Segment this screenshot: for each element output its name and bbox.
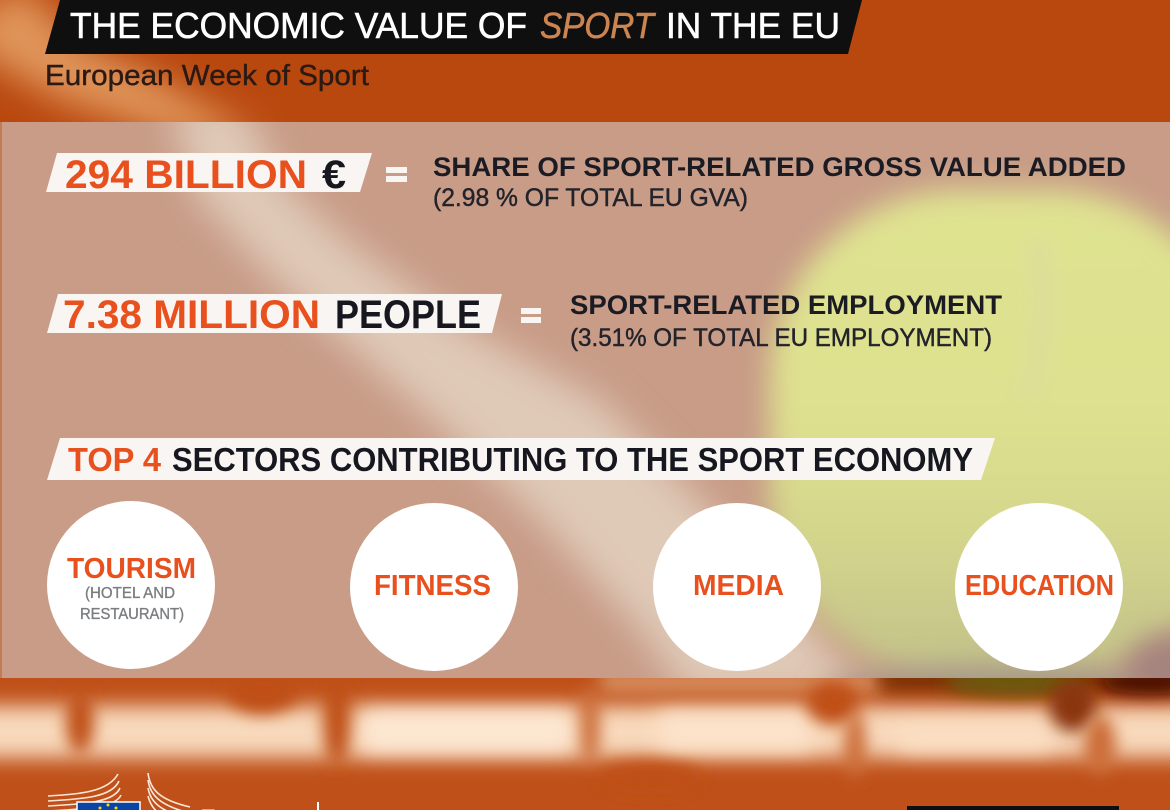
- stat: 294 billion euro: SHARE OF SPORT-RELATED GROSS VALUE ADDED: [433, 152, 1126, 182]
- stat: 294 billion euro: €: [322, 153, 346, 197]
- stat: 294 billion euro: 294 BILLION: [65, 153, 307, 197]
- background: blurred orange clay court header: [0, 0, 258, 122]
- sector: tourism: [47, 501, 215, 669]
- sector: education: EDUCATION: [965, 570, 1114, 602]
- heading: top 4 sectors: SECTORS CONTRIBUTING TO THE SPORT ECONOMY: [172, 441, 973, 478]
- sector: tourism: RESTAURANT): [80, 606, 184, 623]
- black badge (cropped at the page edge): [907, 806, 1119, 810]
- title banner: SPORT: [540, 5, 657, 46]
- stat: 294 billion euro: (2.98 % OF TOTAL EU GVA): [433, 184, 748, 212]
- sector: fitness: FITNESS: [374, 570, 491, 602]
- panel: translucent content area with tennis ball background: [0, 122, 1170, 678]
- stat: 7.38 million people: 7.38 MILLION: [63, 293, 320, 337]
- subtitle: European Week of Sport: [45, 60, 369, 92]
- stat: 7.38 million people: (3.51% OF TOTAL EU EMPLOYMENT): [570, 324, 992, 352]
- sector: tourism: (HOTEL AND: [85, 585, 175, 602]
- sector: tourism: TOURISM: [67, 553, 196, 585]
- title banner: [45, 0, 862, 54]
- title banner: THE ECONOMIC VALUE OF: [70, 5, 527, 46]
- sector: fitness: [350, 503, 518, 671]
- stat: 7.38 million people: [47, 290, 1003, 352]
- stat: 294 billion euro: [46, 152, 1126, 212]
- sector: media: [653, 503, 821, 671]
- heading: top 4 sectors: TOP 4: [68, 441, 162, 478]
- stat: 7.38 million people: SPORT-RELATED EMPLOYMENT: [570, 290, 1003, 320]
- sector: media: MEDIA: [693, 570, 784, 602]
- background: blurred white court line at the bottom: [0, 666, 1170, 810]
- logo: European Commission (cropped at the page edge): [48, 773, 319, 810]
- title banner: IN THE EU: [666, 5, 840, 46]
- stat: 7.38 million people: PEOPLE: [335, 293, 481, 337]
- sector: education: [955, 503, 1123, 671]
